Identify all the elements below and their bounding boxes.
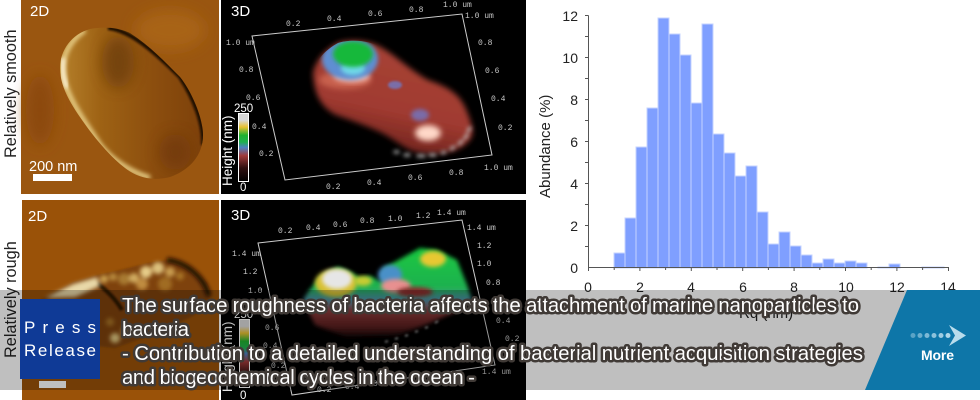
title: press release headline: and biogeochemical cycles in the ocean - [122, 366, 475, 389]
label: 2D: 2D [28, 208, 47, 225]
axis tick labels: 0.4 [263, 342, 278, 351]
panel: relatively rough row label: Relatively rough [2, 241, 20, 358]
axis tick labels: 1.2 [416, 212, 431, 221]
axis tick labels: 0.6 [491, 297, 506, 306]
label: 2D: 2D [30, 3, 49, 20]
axis tick labels: 0.4 [367, 179, 382, 188]
button: more [865, 290, 980, 390]
scale bar [39, 381, 66, 388]
axis tick labels: 0.2 [278, 227, 293, 236]
y axis labels: 4 [570, 176, 578, 192]
colour scale: height [220, 309, 253, 400]
x axis labels: 4 [687, 279, 695, 295]
axis tick labels: 0.8 [255, 307, 270, 316]
axis tick labels: 0.2 [271, 362, 286, 371]
bright surface bumps [45, 262, 184, 343]
axis tick labels: 0.8 [478, 39, 493, 48]
axis tick labels: 0.2 [317, 386, 332, 395]
title: press release headline: - Contribution to a detailed understanding of bacterial nutrient acquisition strategies [122, 342, 863, 365]
axis tick labels: 0.8 [409, 6, 424, 15]
x axis title: Rq (nm) [739, 305, 793, 322]
title: press release headline [122, 294, 863, 389]
axis tick labels: 0.8 [239, 66, 254, 75]
x axis labels: 0 [584, 279, 592, 295]
axis tick labels: 1.4 um [467, 224, 496, 233]
axis tick labels: 0.4 [306, 224, 321, 233]
axis tick labels: 0.4 [252, 123, 267, 132]
histogram: abundance vs Rq [537, 8, 956, 322]
white edge speckles [395, 128, 470, 156]
axis tick labels: 0.6 [265, 324, 280, 333]
axis tick labels: 0.6 [485, 67, 500, 76]
y axis labels: 0 [570, 260, 578, 276]
x axis labels: 14 [940, 279, 956, 295]
chart axes [258, 220, 495, 395]
axis tick labels: 0.8 [449, 169, 464, 178]
axis tick labels: 0.8 [360, 217, 375, 226]
colour scale: height: Height (nm) [220, 115, 235, 186]
3D smooth cell surface [313, 38, 473, 156]
axis tick labels: 1.4 um [232, 250, 261, 259]
chart axes [252, 14, 492, 180]
axis tick labels: 1.0 [248, 287, 263, 296]
axis tick labels: 0.2 [505, 335, 520, 344]
label: 3D: 3D [231, 3, 250, 20]
axis tick labels: 0.6 [333, 221, 348, 230]
x axis labels: 12 [889, 279, 905, 295]
colour scale: height: 250 [234, 103, 253, 115]
axis tick labels: 1.0 um [443, 1, 472, 10]
axis tick labels: 0.2 [498, 124, 513, 133]
icon: smooth cell shape [55, 25, 207, 183]
x axis labels: 8 [790, 279, 798, 295]
panel: 3D AFM image of smooth bacterium [220, 0, 526, 194]
axis tick labels: 0.4 [491, 95, 506, 104]
axis tick labels: 0.2 [286, 20, 301, 29]
button: more: More [921, 347, 954, 363]
axis tick labels [232, 209, 520, 395]
label: 3D: 3D [231, 207, 250, 224]
axis tick labels: 0.2 [326, 183, 341, 192]
y axis labels: 6 [570, 134, 578, 150]
axis tick labels: 0.4 [327, 15, 342, 24]
title: press release headline: bacteria [122, 318, 190, 341]
axis tick labels: 0.4 [345, 383, 360, 392]
axis tick labels: 1.4 um [437, 209, 466, 218]
icon: dotted arrow [910, 325, 966, 346]
panel: 3D AFM image of rough bacterium [220, 200, 526, 400]
y axis labels: 10 [562, 50, 578, 66]
icon: rough cell shape [40, 260, 210, 348]
axis tick labels: 1.2 [477, 242, 492, 251]
y axis title: Abundance (%) [537, 95, 554, 198]
title: press release headline: The surface roughness of bacteria affects the attachment of marine nanoparticles to [122, 294, 859, 317]
axis tick labels: 1.0 um [226, 39, 255, 48]
axis tick labels: 1.0 [388, 215, 403, 224]
banner: translucent press release strip [0, 290, 980, 390]
axis tick labels: 1.0 [477, 260, 492, 269]
bars [614, 18, 944, 268]
axis tick labels: 0.4 [496, 317, 511, 326]
panel: 2D AFM image of smooth bacterium [21, 0, 219, 194]
colour scale: height: Height (nm) [220, 321, 235, 392]
badge: press release: Release [24, 341, 96, 360]
y axis labels: 8 [570, 92, 578, 108]
axis tick labels: 0.8 [486, 279, 501, 288]
axis tick labels: 1.4 um [482, 368, 511, 377]
axis tick labels: 1.0 um [465, 12, 494, 21]
panel: 2D AFM image of rough bacterium [22, 200, 219, 400]
panel: relatively smooth row label: Relatively smooth [2, 30, 20, 158]
x axis labels [584, 279, 956, 295]
scale bar: 200 nm: 200 nm [29, 159, 77, 175]
axes [585, 16, 948, 271]
colour scale: height: 250 [234, 309, 253, 321]
axis tick labels: 0.6 [368, 10, 383, 19]
colour scale: height: 0 [240, 182, 246, 194]
colour scale: height [220, 103, 253, 194]
axis tick labels: 0.6 [373, 380, 388, 389]
axis tick labels: 0.6 [408, 174, 423, 183]
x axis labels: 2 [636, 279, 644, 295]
axis tick labels: 1.0 um [484, 164, 513, 173]
badge: press release: Press [24, 318, 96, 337]
axis tick labels: 0.6 [246, 94, 261, 103]
axis tick labels: 1.2 [243, 268, 258, 277]
y axis labels: 12 [562, 8, 578, 24]
axis tick labels [226, 1, 513, 192]
x axis labels: 10 [838, 279, 854, 295]
3D rough cell surface [303, 248, 472, 342]
x axis labels: 6 [739, 279, 747, 295]
axis tick labels: 0.2 [259, 150, 274, 159]
white edge speckles [385, 321, 438, 342]
badge: press release [20, 299, 100, 379]
y axis labels [562, 8, 578, 276]
y axis labels: 2 [570, 218, 578, 234]
